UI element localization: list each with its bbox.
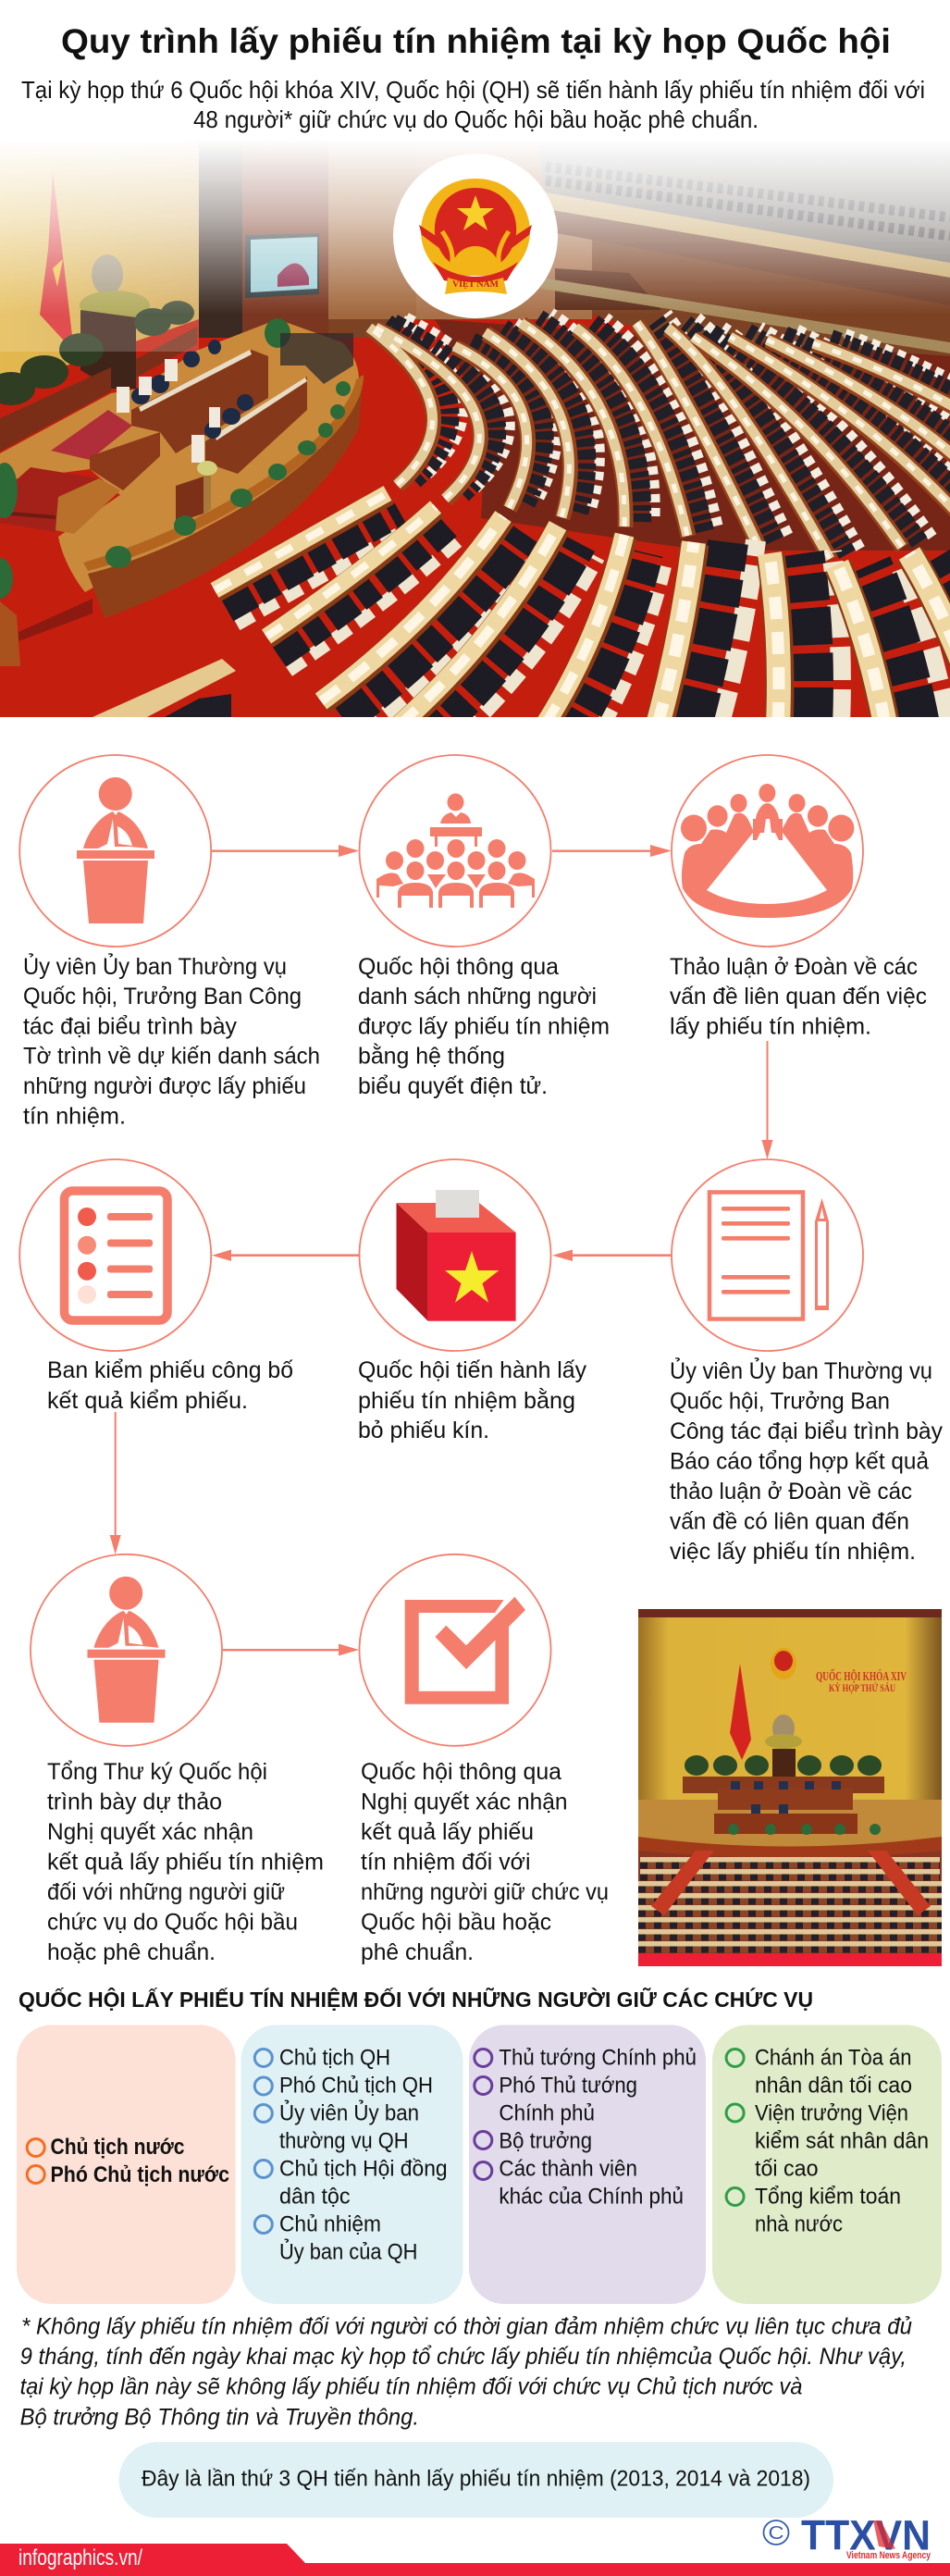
bullets and labels: kiểm sát nhân dân bbox=[755, 2129, 929, 2154]
photo: assembly session with red bar bbox=[638, 1609, 942, 1966]
seating rows bbox=[638, 1860, 942, 1950]
step 1 text: những người được lấy phiếu bbox=[23, 1073, 306, 1099]
stage flowers bbox=[0, 318, 351, 599]
back wall right bbox=[328, 229, 950, 356]
step 5 text: Quốc hội tiến hành lấy bbox=[358, 1357, 586, 1383]
bullets and labels: khác của Chính phủ bbox=[499, 2185, 684, 2210]
audience rows upper bbox=[400, 313, 950, 549]
step 5 text: bỏ phiếu kín. bbox=[358, 1418, 489, 1443]
logo: TTXVN: TTXVN bbox=[801, 2511, 931, 2559]
bullets and labels bbox=[475, 2046, 697, 2210]
callout pill bbox=[119, 2442, 833, 2518]
bullets and labels: Phó Chủ tịch QH bbox=[279, 2074, 433, 2099]
bullets and labels bbox=[254, 2046, 448, 2265]
arrow: step 1 to 2 bbox=[212, 845, 359, 857]
audience rows lower left bbox=[237, 527, 458, 671]
floor steps bottom-left bbox=[19, 599, 93, 641]
step 2 text: danh sách những người bbox=[358, 984, 597, 1009]
arrow: step 4 to 5 bbox=[552, 1249, 672, 1261]
step 4 text: Ủy viên Ủy ban Thường vụ bbox=[670, 1356, 932, 1384]
step 4 text: vấn đề có liên quan đến bbox=[670, 1508, 909, 1534]
plants bbox=[685, 1755, 882, 1776]
step 2 text: Quốc hội thông qua bbox=[358, 954, 559, 980]
section heading: QUỐC HỘI LẤY PHIẾU TÍN NHIỆM ĐỐI VỚI NHỮNG NGƯỜI GIỮ CÁC CHỨC VỤ bbox=[19, 1987, 813, 2012]
arrow: step 6 to 7 bbox=[110, 1412, 121, 1554]
bullets and labels: Chủ tịch QH bbox=[279, 2046, 390, 2071]
step 8 text: tín nhiệm đối với bbox=[361, 1849, 531, 1875]
logo: TTXVN: C bbox=[768, 2523, 784, 2544]
step 3 text: Thảo luận ở Đoàn về các bbox=[670, 954, 918, 980]
step 5: ballot circle icon bbox=[359, 1159, 551, 1351]
step 2 text: được lấy phiếu tín nhiệm bbox=[358, 1014, 610, 1040]
step 3 text: vấn đề liên quan đến việc bbox=[670, 984, 927, 1009]
aisles bbox=[651, 1851, 714, 1915]
footer bar bbox=[0, 2544, 950, 2576]
step 1 text: Ủy viên Ủy ban Thường vụ bbox=[23, 952, 287, 980]
callout pill: Đây là lần thứ 3 QH tiến hành lấy phiếu tín nhiệm (2013, 2014 và 2018) bbox=[142, 2467, 810, 2492]
hero photo: National Assembly hall bbox=[0, 139, 950, 756]
audience rows lower middle bbox=[374, 554, 672, 717]
step 4 text: Báo cáo tổng hợp kết quả bbox=[670, 1449, 929, 1475]
step 7 text bbox=[47, 1759, 324, 1965]
panel: President group bbox=[17, 2025, 235, 2304]
step 1 text: tác đại biểu trình bày bbox=[23, 1014, 237, 1040]
step 7 text: kết quả lấy phiếu tín nhiệm bbox=[47, 1849, 324, 1875]
step 1: presenter circle icon bbox=[19, 755, 211, 947]
stage front band bbox=[88, 370, 364, 618]
bullets and labels: Thủ tướng Chính phủ bbox=[499, 2046, 697, 2071]
step 3 text bbox=[670, 954, 927, 1040]
left wall bbox=[0, 152, 199, 374]
wall text: QUỐC HỘI KHÓA XIV bbox=[816, 1667, 907, 1684]
step 7 text: Nghị quyết xác nhận bbox=[47, 1819, 253, 1845]
panel: judiciary and audit group bbox=[712, 2025, 942, 2304]
bullets and labels: Chính phủ bbox=[499, 2101, 595, 2126]
arrow: step 7 to 8 bbox=[223, 1643, 359, 1656]
bullets and labels: nhà nước bbox=[755, 2212, 843, 2237]
footnote bbox=[20, 2314, 912, 2431]
step 8 text: Quốc hội thông qua bbox=[361, 1759, 561, 1785]
step 8 text: những người giữ chức vụ bbox=[361, 1879, 609, 1905]
step 1 text: Tờ trình về dự kiến danh sách bbox=[23, 1044, 320, 1070]
step 7 text: hoặc phê chuẩn. bbox=[47, 1939, 216, 1965]
step 6 text bbox=[47, 1357, 293, 1414]
step 8: approval circle icon bbox=[359, 1554, 551, 1746]
bullets and labels: Chánh án Tòa án bbox=[755, 2046, 912, 2071]
emblem on white circle bbox=[393, 154, 558, 318]
bullets and labels bbox=[27, 2135, 229, 2187]
step 8 text: Nghị quyết xác nhận bbox=[361, 1790, 568, 1815]
wall emblem bbox=[771, 1648, 796, 1679]
step 2 text bbox=[358, 954, 610, 1099]
step 5 text: phiếu tín nhiệm bằng bbox=[358, 1387, 575, 1414]
platforms and tables bbox=[131, 350, 268, 453]
step 1 text bbox=[23, 952, 320, 1129]
title: Quy trình lấy phiếu tín nhiệm tại kỳ họp Quốc hội bbox=[61, 22, 891, 60]
emblem body bbox=[419, 179, 532, 294]
audience rows lower right bbox=[720, 540, 950, 723]
icon: document and pen bbox=[709, 1192, 829, 1319]
stage walls and plants bbox=[0, 367, 111, 452]
step 6: vote results circle icon bbox=[19, 1159, 211, 1351]
bullets and labels: Viện trưởng Viện bbox=[755, 2101, 908, 2126]
step 4: report circle icon bbox=[672, 1159, 863, 1351]
footer bar: infographics.vn/ bbox=[19, 2545, 142, 2570]
officials at tables bbox=[131, 340, 253, 439]
step 3: group discussion circle icon bbox=[672, 755, 863, 947]
step 7: secretary circle icon bbox=[31, 1554, 222, 1746]
icon: speaker at podium bbox=[87, 1577, 165, 1723]
flag bbox=[730, 1664, 751, 1760]
step 2: assembly circle icon bbox=[359, 755, 551, 947]
emblem body: VIỆT NAM bbox=[452, 279, 500, 289]
icon: checkbox tick bbox=[405, 1597, 525, 1704]
icon: ballot box with star bbox=[396, 1190, 516, 1321]
bullets and labels: Phó Chủ tịch nước bbox=[50, 2162, 229, 2187]
bullets and labels: Bộ trưởng bbox=[499, 2129, 592, 2154]
bullets and labels bbox=[726, 2046, 929, 2237]
screen bbox=[245, 233, 319, 298]
flag bbox=[40, 173, 72, 341]
photographers bbox=[280, 333, 353, 384]
step 6 text: Ban kiểm phiếu công bố bbox=[47, 1357, 293, 1383]
step 2 text: biểu quyết điện tử. bbox=[358, 1073, 548, 1099]
bullets and labels: Chủ tịch Hội đồng bbox=[279, 2157, 448, 2182]
bullets and labels: Chủ tịch nước bbox=[50, 2135, 185, 2160]
step 7 text: chức vụ do Quốc hội bầu bbox=[47, 1910, 298, 1936]
bust and flowers bbox=[92, 254, 123, 295]
step 8 text bbox=[361, 1759, 609, 1965]
steps bbox=[0, 467, 99, 532]
arrow: step 2 to 3 bbox=[552, 845, 672, 857]
bullets and labels: thường vụ QH bbox=[279, 2129, 409, 2154]
red upper carpet bbox=[51, 410, 132, 460]
step 7 text: trình bày dự thảo bbox=[47, 1790, 222, 1815]
step 6 text: kết quả kiểm phiếu. bbox=[47, 1388, 248, 1414]
step 8 text: Quốc hội bầu hoặc bbox=[361, 1910, 551, 1936]
footnote: tại kỳ họp lần này sẽ không lấy phiếu tín nhiệm đối với chức vụ Chủ tịch nước và bbox=[20, 2374, 803, 2400]
arrow: step 5 to 6 bbox=[212, 1249, 359, 1261]
bullets and labels: nhân dân tối cao bbox=[755, 2074, 912, 2099]
bullets and labels: Tổng kiểm toán bbox=[755, 2185, 901, 2210]
bullets and labels: tối cao bbox=[755, 2157, 818, 2182]
stage bbox=[683, 1777, 884, 1793]
bust bbox=[772, 1715, 795, 1736]
panel: National Assembly group bbox=[241, 2025, 463, 2304]
footnote: Bộ trưởng Bộ Thông tin và Truyền thông. bbox=[20, 2405, 419, 2431]
step 1 text: tín nhiệm. bbox=[23, 1103, 126, 1129]
step 3 text: lấy phiếu tín nhiệm. bbox=[670, 1014, 871, 1040]
step 7 text: đối với những người giữ bbox=[47, 1879, 285, 1905]
stage floor bbox=[0, 319, 359, 592]
step 4 text: thảo luận ở Đoàn về các bbox=[670, 1479, 912, 1505]
intro text bbox=[21, 76, 925, 133]
step 4 text: Công tác đại biểu trình bày bbox=[670, 1418, 943, 1444]
arrow: step 3 to 4 bbox=[762, 1041, 773, 1159]
step 4 text: việc lấy phiếu tín nhiệm. bbox=[670, 1539, 916, 1565]
bullets and labels: Ủy viên Ủy ban bbox=[279, 2099, 419, 2126]
panel: Government group bbox=[469, 2025, 706, 2304]
step 4 text: Quốc hội, Trưởng Ban bbox=[670, 1388, 890, 1414]
intro text: 48 người* giữ chức vụ do Quốc hội bầu hoặc phê chuẩn. bbox=[193, 105, 759, 133]
audience base upper bbox=[435, 319, 950, 551]
step 5 text bbox=[358, 1357, 586, 1443]
bullets and labels: Các thành viên bbox=[499, 2157, 637, 2182]
step 7 text: Tổng Thư ký Quốc hội bbox=[47, 1759, 267, 1785]
step 4 text bbox=[670, 1356, 943, 1565]
footnote: 9 tháng, tính đến ngày khai mạc kỳ họp tổ chức lấy phiếu tín nhiệmcủa Quốc hội. Như vậy, bbox=[20, 2344, 907, 2370]
top fade bbox=[0, 139, 950, 315]
front row desks bbox=[93, 659, 236, 717]
bullets and labels: Chủ nhiệm bbox=[279, 2212, 381, 2237]
lectern bbox=[176, 477, 204, 523]
icon: audience facing a table bbox=[376, 794, 535, 908]
bullets and labels: Phó Thủ tướng bbox=[499, 2074, 637, 2099]
step 2 text: bằng hệ thống bbox=[358, 1042, 505, 1070]
step 8 text: phê chuẩn. bbox=[361, 1939, 474, 1965]
photo: assembly session with red bar: KỲ HỌP THỨ SÁU bbox=[829, 1681, 895, 1694]
icon: round table discussion bbox=[681, 784, 854, 918]
bullets and labels: dân tộc bbox=[279, 2185, 351, 2210]
footnote: * Không lấy phiếu tín nhiệm đối với người có thời gian đảm nhiệm chức vụ liên tục chưa đủ bbox=[21, 2314, 912, 2340]
icon: checklist bbox=[65, 1191, 167, 1320]
step 8 text: kết quả lấy phiếu bbox=[361, 1819, 534, 1845]
icon: speaker at podium bbox=[77, 777, 154, 923]
bullets and labels: Ủy ban của QH bbox=[279, 2238, 417, 2265]
step 1 text: Quốc hội, Trưởng Ban Công bbox=[23, 984, 302, 1009]
